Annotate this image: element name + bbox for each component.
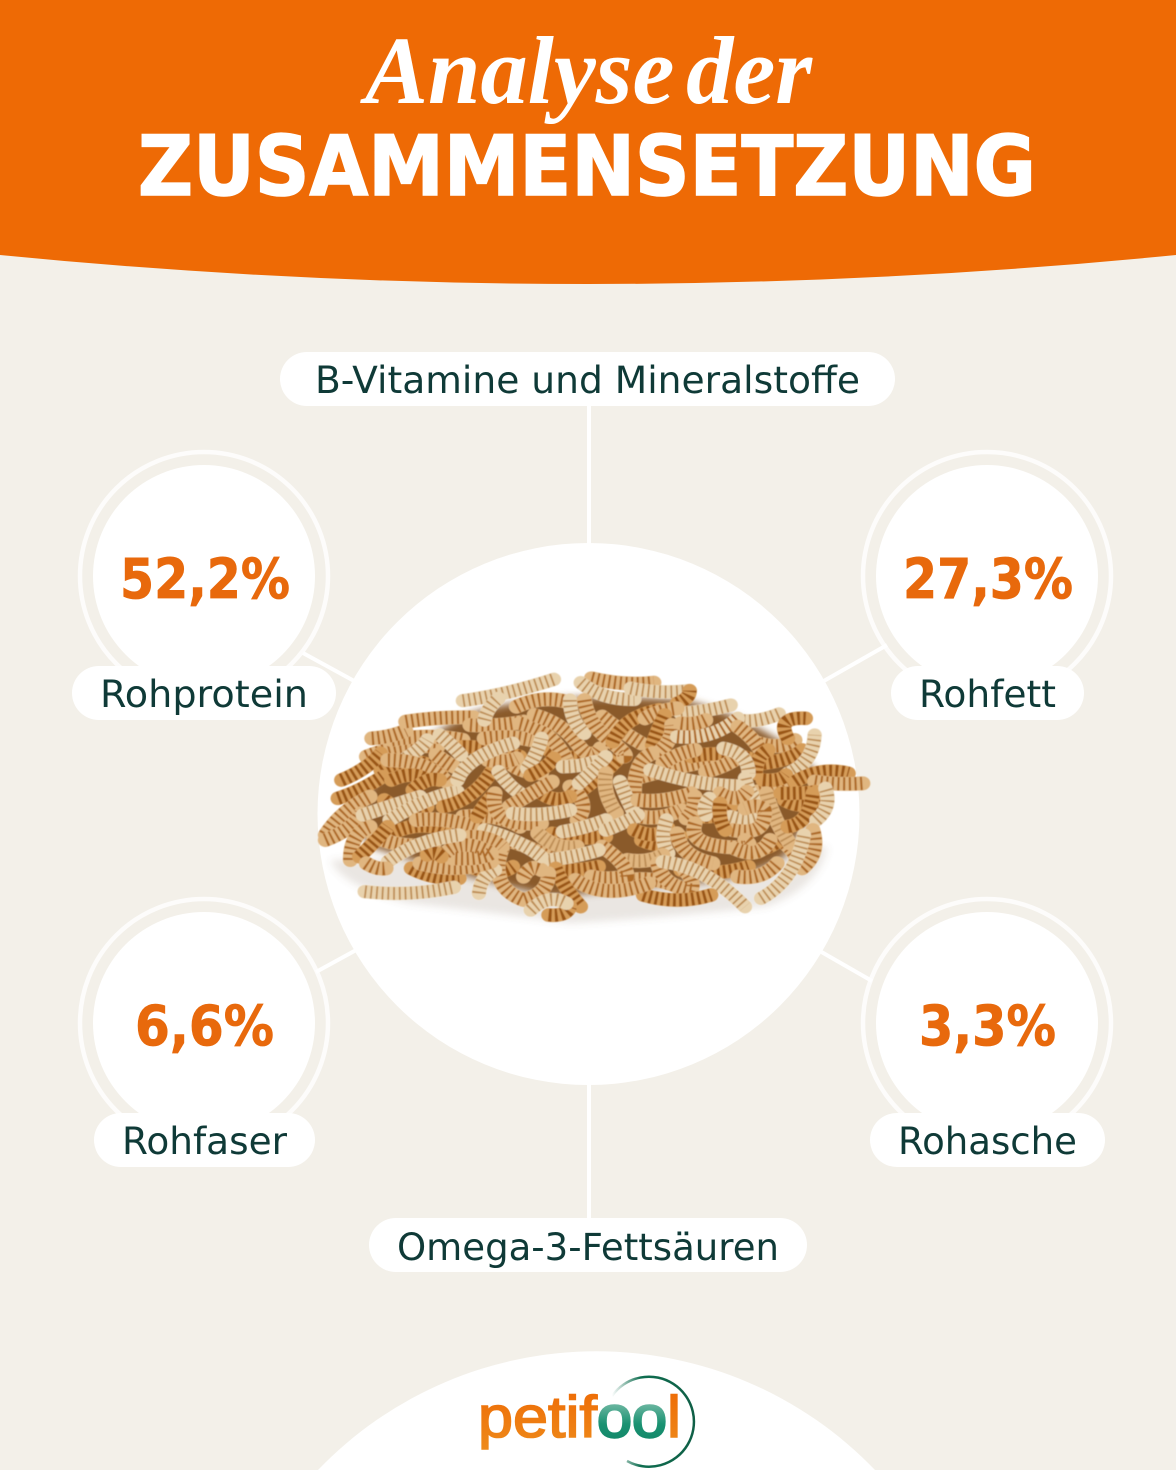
label: B-Vitamine und Mineralstoffe: B-Vitamine und Mineralstoffe	[315, 358, 860, 402]
stat: Rohprotein	[72, 452, 336, 720]
stat: Rohfett: 27,3%	[903, 547, 1073, 611]
stat: Rohasche: Rohasche	[898, 1119, 1077, 1163]
stat: Rohasche: 3,3%	[919, 994, 1056, 1058]
title: italic line: Analyse der	[360, 17, 814, 124]
connector lines	[303, 400, 887, 1225]
photo: pile of dried mealworms	[325, 678, 863, 923]
logo: petifool: petifool	[478, 1385, 681, 1450]
header band	[0, 0, 1176, 284]
central white circle with photo	[318, 543, 863, 1085]
stat: Rohprotein: Rohprotein	[100, 672, 308, 716]
stat: Rohfett: Rohfett	[919, 672, 1056, 716]
stat: Rohfaser	[80, 899, 328, 1167]
logo: petifool	[478, 1377, 694, 1467]
stat: Rohfaser: Rohfaser	[122, 1119, 288, 1163]
stat: Rohasche	[863, 899, 1111, 1167]
title: bold line: ZUSAMMENSETZUNG	[138, 118, 1036, 215]
stat: Rohfaser: 6,6%	[135, 994, 274, 1058]
label: Omega-3-Fettsäuren: Omega-3-Fettsäuren	[397, 1225, 779, 1269]
stat: Rohfett	[863, 452, 1111, 720]
footer: white arc with logo	[318, 1351, 875, 1470]
stat: Rohprotein: 52,2%	[120, 547, 290, 611]
